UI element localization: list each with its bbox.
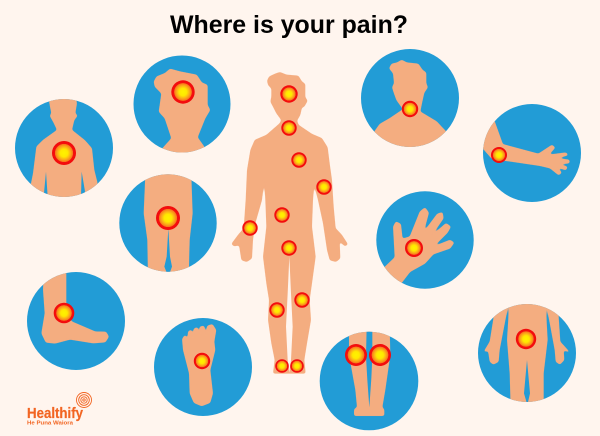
title: Where is your pain? <box>170 11 408 39</box>
pain point: abdomen <box>274 207 290 223</box>
panel: head <box>134 56 230 152</box>
panel: full body figure <box>232 72 348 373</box>
panel: arm <box>473 104 581 202</box>
pain point: head <box>280 85 298 103</box>
panel: ankle <box>27 263 125 370</box>
pain point: groin <box>281 240 297 256</box>
panel: chest <box>15 99 113 197</box>
panel: hand <box>376 191 474 293</box>
pain point: left knee <box>269 302 285 318</box>
logo wordmark: Healthify <box>27 405 84 422</box>
icon: logo rings <box>76 392 92 408</box>
pain point: wrist <box>242 220 258 236</box>
pain point: right knee <box>294 292 310 308</box>
pain point: left foot <box>275 359 289 373</box>
pain point: elbow <box>316 179 332 195</box>
pain point: right foot <box>290 359 304 373</box>
logo: Healthify <box>27 392 92 426</box>
panel: hips <box>478 304 576 402</box>
pain point: chest <box>291 152 307 168</box>
pain point: neck <box>281 120 297 136</box>
body silhouette <box>232 72 348 373</box>
panel: upper thigh <box>119 174 217 272</box>
panel: foot <box>154 318 252 416</box>
logo tagline: He Puna Waiora <box>27 420 74 426</box>
panel: knees <box>320 327 418 430</box>
panel: neck <box>361 49 459 147</box>
